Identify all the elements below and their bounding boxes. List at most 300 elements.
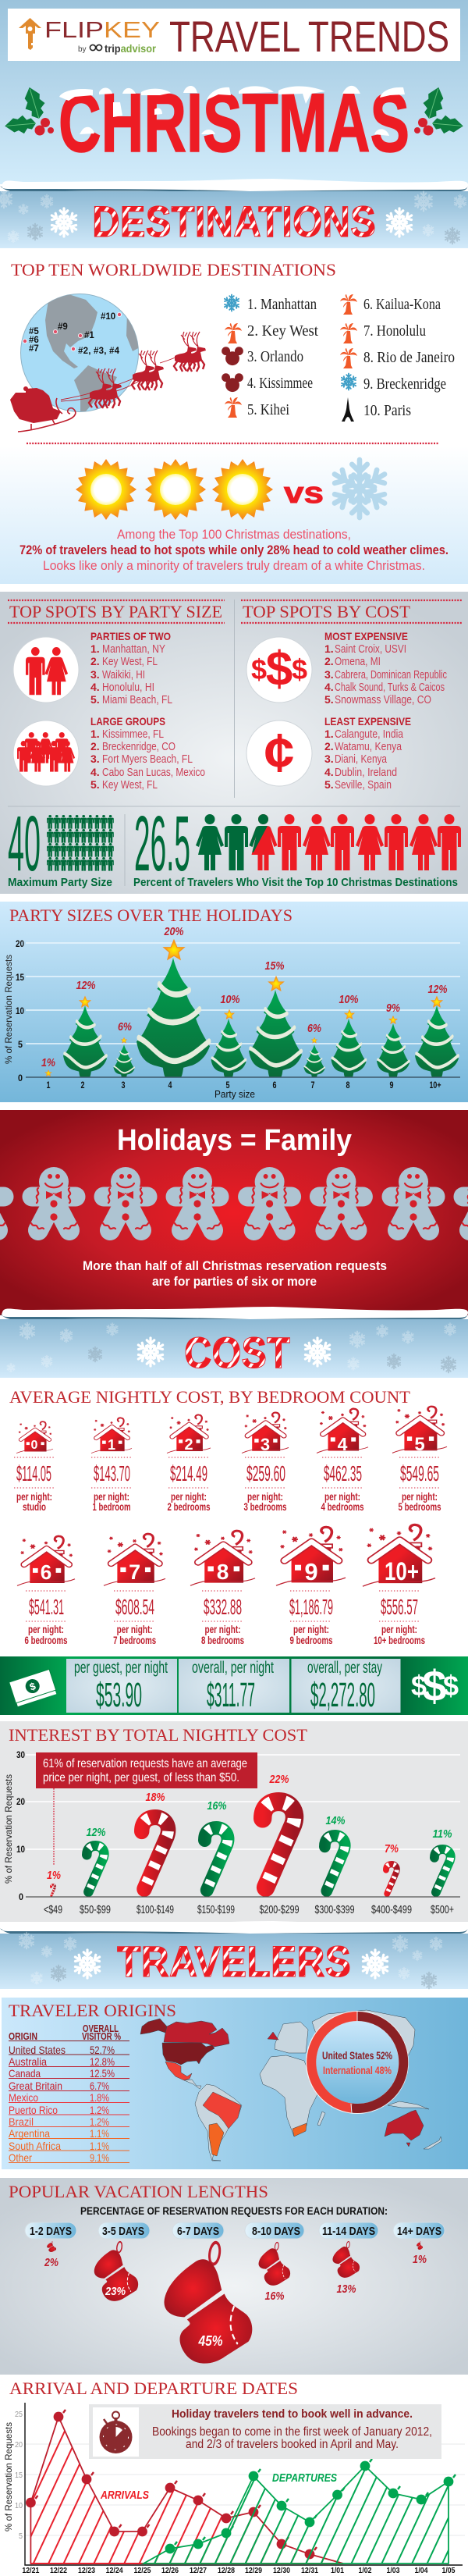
10 plus bedrooms: $556.57: [381, 1595, 418, 1619]
6 bedrooms: [17, 1536, 75, 1646]
list: parties of two: Manhattan, NY: [102, 643, 165, 656]
icon: snowflake: [331, 460, 388, 518]
panel: traveler origins: [2, 1998, 468, 2169]
list: most expensive: Omena, MI: [335, 656, 381, 668]
destination names: 4. Kissimmee: [247, 375, 313, 392]
stockings: [47, 2241, 423, 2364]
logo wordmark: FLIP KEY: [44, 18, 160, 43]
y axis labels: [16, 940, 25, 1083]
callout: 61% of reservation requests have an average: [43, 1757, 247, 1770]
y axis labels: 30: [16, 1751, 25, 1760]
10 plus bedrooms: 10+: [385, 1557, 419, 1585]
icon: house key: [19, 18, 41, 50]
x axis labels: 12/30: [273, 2566, 290, 2575]
x axis labels: $300-$399: [315, 1903, 354, 1916]
list: most expensive: MOST EXPENSIVE: [324, 630, 408, 642]
y axis labels: 5: [18, 1041, 23, 1050]
icon: snowflake: [224, 295, 239, 311]
10 plus bedrooms: [363, 1525, 435, 1646]
rank labels: #7: [29, 344, 39, 354]
10 plus bedrooms: 10+ bedrooms: [374, 1634, 425, 1646]
snow ledge: [0, 179, 468, 193]
2 bedrooms: 2 bedrooms: [167, 1500, 211, 1513]
studio: [14, 1421, 55, 1513]
origin table: VISITOR %: [82, 2030, 121, 2042]
icon: reindeer pair two: [132, 350, 164, 390]
list: parties of two: 3.: [90, 668, 100, 681]
list: parties of two: Waikiki, HI: [102, 669, 145, 681]
list: least expensive: 2.: [324, 740, 334, 753]
list: parties of two: [90, 630, 172, 706]
value labels: 6%: [118, 1020, 132, 1034]
origin table: 1.2%: [90, 2115, 109, 2128]
stat: per guest per night: $53.90: [96, 1676, 142, 1714]
label: departures: DEPARTURES: [272, 2471, 337, 2485]
x axis labels: 12/23: [78, 2566, 95, 2575]
destination names: 5. Kihei: [247, 401, 289, 418]
list: most expensive: 5.: [324, 693, 334, 706]
duration pills: 8-10 DAYS: [252, 2226, 300, 2238]
list: most expensive: [324, 630, 447, 706]
1 bedroom: [91, 1418, 132, 1513]
y axis labels: 15: [15, 2471, 23, 2480]
value labels: [41, 925, 448, 1069]
section band: cost: [0, 1319, 468, 1378]
x axis labels: 10+: [429, 1081, 441, 1091]
list: least expensive: 5.: [324, 778, 334, 791]
y axis title: % of Reservation Requests: [3, 2422, 14, 2532]
panel: overall costs: [0, 1656, 468, 1715]
rank labels: [29, 312, 120, 356]
9 bedrooms: per night:: [293, 1623, 329, 1635]
y axis labels: 20: [16, 940, 24, 949]
list: least expensive: 4.: [324, 766, 334, 778]
x axis labels: 1/02: [359, 2566, 372, 2575]
origin table: 1.1%: [90, 2140, 109, 2152]
value labels: 7%: [385, 1842, 399, 1856]
caption: are for parties of six or more: [152, 1274, 317, 1289]
value labels: 18%: [145, 1791, 165, 1804]
x axis labels: 12/22: [50, 2566, 67, 2575]
6 bedrooms: $541.31: [29, 1595, 64, 1619]
rank labels: #10: [101, 312, 115, 322]
value labels: 16%: [207, 1799, 226, 1813]
duration pills: [25, 2222, 445, 2239]
destination names: 1. Manhattan: [247, 296, 317, 313]
7 bedrooms: 7: [129, 1560, 140, 1584]
location markers: [23, 312, 122, 351]
list: least expensive: Dublin, Ireland: [335, 767, 397, 779]
list: parties of two: Miami Beach, FL: [102, 694, 172, 706]
callout: booking advice: Holiday travelers tend to book well in advance.: [172, 2407, 413, 2421]
list: large groups: Kissimmee, FL: [102, 728, 164, 741]
x axis labels: $150-$199: [197, 1903, 235, 1916]
arrival and departure chart: [3, 2403, 465, 2575]
icon: palm: [225, 323, 242, 343]
5 bedrooms: [392, 1407, 447, 1513]
icon: reindeer pair three: [174, 332, 206, 372]
7 bedrooms: per night:: [117, 1623, 153, 1635]
x axis labels: 4: [168, 1081, 172, 1091]
x axis labels: 6: [273, 1081, 276, 1091]
tripadvisor by-line: by: [78, 45, 87, 54]
icon: cent: ¢: [264, 722, 294, 783]
origin table: 52.7%: [90, 2044, 115, 2056]
stat: percent of travelers: 26.5: [134, 800, 190, 888]
5 bedrooms: 5: [414, 1434, 425, 1455]
callout: booking advice: and 2/3 of travelers booked in April and May.: [186, 2438, 399, 2451]
origin table: [9, 2023, 129, 2164]
list: least expensive: Watamu, Kenya: [335, 741, 402, 753]
world map: [140, 2010, 441, 2161]
2 bedrooms: 2: [184, 1436, 193, 1453]
icon: dollars: $: [266, 642, 292, 696]
value labels: 12%: [86, 1826, 106, 1839]
icon: group: [13, 720, 79, 786]
icon: palm: [340, 323, 357, 343]
heading: arrival and departure dates: ARRIVAL AND DEPARTURE DATES: [9, 2379, 298, 2398]
x axis labels: 7: [310, 1081, 315, 1091]
value labels: 12%: [427, 983, 448, 996]
subheading: PERCENTAGE OF RESERVATION REQUESTS FOR EACH DURATION:: [80, 2204, 388, 2217]
list: large groups: Cabo San Lucas, Mexico: [102, 767, 205, 779]
8 bedrooms: 8: [217, 1560, 229, 1584]
origin table: United States: [9, 2044, 66, 2056]
icon: eiffel tower: [342, 397, 354, 422]
origin table: Mexico: [9, 2091, 38, 2104]
background snowflakes: [19, 1933, 443, 1984]
6 bedrooms: 6 bedrooms: [25, 1634, 68, 1646]
heading: party size: TOP SPOTS BY PARTY SIZE: [9, 602, 222, 621]
value labels: 13%: [337, 2282, 356, 2296]
x axis labels: 9: [390, 1081, 393, 1091]
icon: sleigh: [10, 386, 76, 432]
destination names: 7. Honolulu: [363, 322, 426, 340]
y axis labels: 0: [19, 1893, 23, 1902]
6 bedrooms: 6: [41, 1560, 51, 1584]
value labels: 15%: [265, 959, 284, 973]
value labels: 11%: [432, 1827, 452, 1841]
origin table: Other: [9, 2151, 32, 2164]
list: large groups: 4.: [90, 766, 100, 778]
value labels: 23%: [105, 2285, 126, 2298]
1 bedroom: 1: [108, 1437, 115, 1453]
value labels: [47, 1773, 452, 1882]
1 bedroom: per night:: [94, 1490, 129, 1503]
background snowflakes: [6, 1323, 456, 1372]
origin table: 1.8%: [90, 2091, 109, 2104]
heading: average nightly cost: AVERAGE NIGHTLY COST, BY BEDROOM COUNT: [9, 1387, 411, 1407]
rank labels: #6: [29, 336, 39, 345]
y axis labels: 0: [18, 1074, 23, 1083]
donut chart: International 48%: [323, 2064, 392, 2076]
2 bedrooms: $214.49: [170, 1461, 207, 1485]
x axis labels: 12/24: [106, 2566, 123, 2575]
y axis title: % of Reservation Requests: [3, 955, 14, 1064]
value labels: 2%: [44, 2256, 58, 2269]
bedroom cost grid: [14, 1407, 447, 1646]
x axis labels: $500+: [431, 1903, 454, 1916]
list: large groups: Fort Myers Beach, FL: [102, 753, 193, 766]
value labels: 1%: [41, 1056, 55, 1069]
icon: mickey: [222, 347, 243, 365]
hot versus cold panel: [0, 443, 468, 584]
x axis labels: 12/29: [245, 2566, 262, 2575]
list: large groups: Key West, FL: [102, 779, 158, 792]
grey snowflakes: [27, 224, 460, 244]
holly left: [4, 84, 54, 136]
x axis labels: 5: [226, 1081, 230, 1091]
donut chart: United States 52%: [322, 2049, 392, 2062]
destination names: 2. Key West: [247, 322, 318, 340]
origin table: 6.7%: [90, 2080, 109, 2092]
grey snowflakes: [51, 1966, 437, 1988]
x axis labels: $100-$149: [136, 1903, 174, 1916]
icon: dollars: [246, 637, 312, 703]
icon: dollars: $: [251, 653, 267, 685]
x axis labels: $50-$99: [80, 1903, 111, 1916]
gingerbread row: [0, 1167, 468, 1230]
3 bedrooms: 3: [261, 1435, 270, 1454]
callout: booking advice: Bookings began to come in the first week of January 2012,: [152, 2425, 432, 2439]
list: most expensive: 1.: [324, 642, 334, 655]
destination names: 3. Orlando: [247, 348, 303, 365]
value labels: 22%: [269, 1773, 289, 1786]
origin table: South Africa: [9, 2140, 61, 2152]
caption: [83, 1258, 387, 1289]
4 bedrooms: 4: [338, 1434, 348, 1454]
icon: banknotes: [9, 1669, 57, 1706]
studio: 0: [31, 1439, 38, 1452]
icon: snowflake: [341, 374, 356, 390]
y axis labels: [16, 1751, 25, 1902]
origin table: Canada: [9, 2067, 41, 2080]
x axis labels: 8: [346, 1081, 350, 1091]
9 bedrooms: $1,186.79: [289, 1595, 333, 1619]
list: large groups: [90, 715, 205, 792]
4 bedrooms: $462.35: [324, 1461, 362, 1485]
x axis labels: [44, 1903, 454, 1916]
y axis labels: [15, 2411, 23, 2541]
x axis labels: 3: [122, 1081, 125, 1091]
x axis labels: 12/26: [161, 2566, 179, 2575]
x axis labels: [22, 2566, 456, 2575]
icon: palm: [225, 397, 242, 418]
heading: top ten worldwide destinations: TOP TEN WORLDWIDE DESTINATIONS: [11, 260, 336, 279]
snowflake right: [385, 208, 413, 237]
background snowflakes: [0, 190, 467, 243]
x axis labels: 1/01: [331, 2566, 344, 2575]
x axis labels: 2: [81, 1081, 84, 1091]
value labels: 10%: [220, 993, 240, 1006]
list: least expensive: LEAST EXPENSIVE: [324, 715, 411, 728]
value labels: 6%: [307, 1022, 321, 1035]
y axis title: % of Reservation Requests: [3, 1774, 14, 1884]
santa sleigh and reindeer: [10, 332, 206, 432]
y axis labels: 20: [16, 1798, 25, 1807]
9 bedrooms: 9 bedrooms: [290, 1634, 333, 1646]
origin table: 12.5%: [90, 2067, 115, 2080]
value labels: 10%: [339, 993, 359, 1006]
heading: TRAVELER ORIGINS: [9, 2001, 176, 2020]
stat: overall per stay: overall, per stay: [307, 1659, 382, 1677]
vs: vs: [284, 477, 324, 510]
1 bedroom: 1 bedroom: [92, 1500, 131, 1513]
rank labels: #9: [58, 322, 68, 332]
list: least expensive: Calangute, India: [335, 728, 404, 741]
list: most expensive: 3.: [324, 668, 334, 681]
x axis labels: 12/27: [190, 2566, 207, 2575]
4 bedrooms: 4 bedrooms: [321, 1500, 364, 1513]
origin table: ORIGIN: [9, 2030, 37, 2042]
icon: sun: [212, 459, 273, 520]
x axis labels: 1/04: [415, 2566, 428, 2575]
icon: mickey: [222, 373, 243, 392]
destination names: 10. Paris: [363, 402, 411, 419]
panel: holidays equals family: [0, 1110, 468, 1315]
list: least expensive: [324, 715, 411, 792]
section band: destinations: [0, 190, 468, 248]
rank labels: #5: [29, 327, 39, 336]
panel: party sizes chart: [0, 902, 468, 1102]
2 bedrooms: per night:: [171, 1490, 207, 1503]
8 bedrooms: $332.88: [204, 1595, 242, 1619]
globe map: [20, 293, 140, 412]
studio: per night:: [16, 1490, 52, 1503]
9 bedrooms: 9: [304, 1558, 318, 1585]
icon: dollars: $: [443, 1670, 459, 1702]
rank labels: #1: [84, 331, 94, 340]
y axis labels: 15: [16, 973, 25, 983]
list: parties of two: Key West, FL: [102, 656, 158, 668]
pictogram: forty people: [47, 815, 114, 871]
top ten list: [222, 294, 455, 422]
header background: [0, 0, 468, 184]
caption: Among the Top 100 Christmas destinations,: [117, 527, 351, 542]
caption: Looks like only a minority of travelers truly dream of a white Christmas.: [43, 558, 425, 573]
bedroom cost grid: $114.05: [16, 1461, 51, 1485]
list: parties of two: 5.: [90, 693, 100, 706]
x axis title: Party size: [214, 1088, 255, 1100]
list: least expensive: Diani, Kenya: [335, 753, 388, 766]
section band: travelers: [0, 1933, 468, 1989]
pictogram: ten people: [196, 814, 461, 870]
3 bedrooms: [242, 1413, 289, 1513]
heading: travelers: TRAVELERS: [117, 1937, 351, 1986]
icon: reindeer pair one: [89, 368, 122, 408]
icon: dollars: $: [422, 1661, 447, 1710]
icon: sun: [76, 459, 136, 520]
stat: overall per night: $311.77: [207, 1676, 255, 1714]
heading: INTEREST BY TOTAL NIGHTLY COST: [9, 1725, 308, 1745]
value labels: 9%: [386, 1002, 400, 1015]
list: large groups: 1.: [90, 728, 100, 740]
x axis labels: $400-$499: [371, 1903, 412, 1916]
stat: overall per stay: [292, 1659, 401, 1714]
snow ledge: [0, 1307, 468, 1321]
list: parties of two: 1.: [90, 642, 100, 655]
snowflake right: [303, 1338, 332, 1366]
8 bedrooms: 8 bedrooms: [201, 1634, 244, 1646]
label: arrivals: ARRIVALS: [100, 2489, 149, 2502]
origin table: 9.1%: [90, 2151, 109, 2164]
origin table: Puerto Rico: [9, 2104, 58, 2116]
y axis labels: 25: [15, 2411, 23, 2419]
3 bedrooms: per night:: [247, 1490, 283, 1503]
snowflake right: [361, 1950, 389, 1978]
series: departures: [144, 2459, 456, 2564]
caption: More than half of all Christmas reservation requests: [83, 1258, 387, 1273]
5 bedrooms: per night:: [402, 1490, 438, 1503]
origin table: 1.1%: [90, 2127, 109, 2140]
stat: overall per night: overall, per night: [192, 1659, 274, 1677]
value labels: 12%: [76, 979, 95, 992]
x axis labels: 12/31: [301, 2566, 318, 2575]
stat: maximum party size: 40: [8, 800, 41, 888]
list: large groups: 2.: [90, 740, 100, 753]
icon: couple: [13, 637, 79, 703]
destination names: 9. Breckenridge: [363, 375, 446, 393]
callout: [36, 1752, 257, 1788]
9 bedrooms: [276, 1527, 346, 1646]
trees: [63, 958, 459, 1077]
origin table: 1.2%: [90, 2104, 109, 2116]
list: most expensive: 4.: [324, 681, 334, 693]
logo and title bar: [8, 9, 460, 61]
stat: maximum party size: Maximum Party Size: [8, 876, 112, 889]
list: large groups: 5.: [90, 778, 100, 791]
heading: PARTY SIZES OVER THE HOLIDAYS: [9, 906, 292, 925]
list: least expensive: Seville, Spain: [335, 779, 392, 792]
list: most expensive: Snowmass Village, CO: [335, 694, 431, 706]
duration pills: 11-14 DAYS: [322, 2226, 375, 2238]
callout: price per night, per guest, of less than $50.: [43, 1771, 239, 1784]
stat: per guest per night: [66, 1659, 177, 1714]
panel: top spots: [0, 592, 468, 894]
list: parties of two: Honolulu, HI: [102, 681, 154, 694]
list: large groups: 3.: [90, 753, 100, 765]
heading: cost: TOP SPOTS BY COST: [243, 602, 411, 621]
icon: dollars: $: [411, 1670, 427, 1702]
list: parties of two: PARTIES OF TWO: [90, 630, 171, 642]
value labels: 14%: [326, 1814, 345, 1827]
candy canes: [51, 1802, 451, 1895]
8 bedrooms: per night:: [204, 1623, 240, 1635]
y axis labels: 10: [16, 1845, 25, 1855]
icon: palm: [340, 294, 357, 315]
origin table: Brazil: [9, 2115, 34, 2128]
stat: overall per night: [179, 1659, 289, 1714]
heading: cost: COST: [184, 1328, 290, 1377]
duration pills: 3-5 DAYS: [102, 2226, 144, 2238]
heading: POPULAR VACATION LENGTHS: [9, 2182, 268, 2201]
y axis labels: 20: [15, 2441, 23, 2450]
donut chart: [306, 2011, 409, 2114]
tripadvisor by-line: tripadvisor: [105, 42, 156, 55]
series: arrivals: [26, 2410, 343, 2564]
x axis labels: [47, 1081, 441, 1091]
bedroom cost grid: $143.70: [94, 1461, 130, 1485]
6 bedrooms: per night:: [28, 1623, 64, 1635]
callout: booking advice: [89, 2404, 441, 2459]
icon: sun: [145, 459, 206, 520]
origin table: 12.8%: [90, 2055, 115, 2068]
icon: stopwatch: [100, 2412, 133, 2453]
panel: popular vacation lengths: [0, 2178, 468, 2375]
2 bedrooms: [167, 1414, 211, 1513]
icon: dollars: $: [292, 653, 307, 685]
stat: overall per stay: $2,272.80: [310, 1676, 375, 1714]
